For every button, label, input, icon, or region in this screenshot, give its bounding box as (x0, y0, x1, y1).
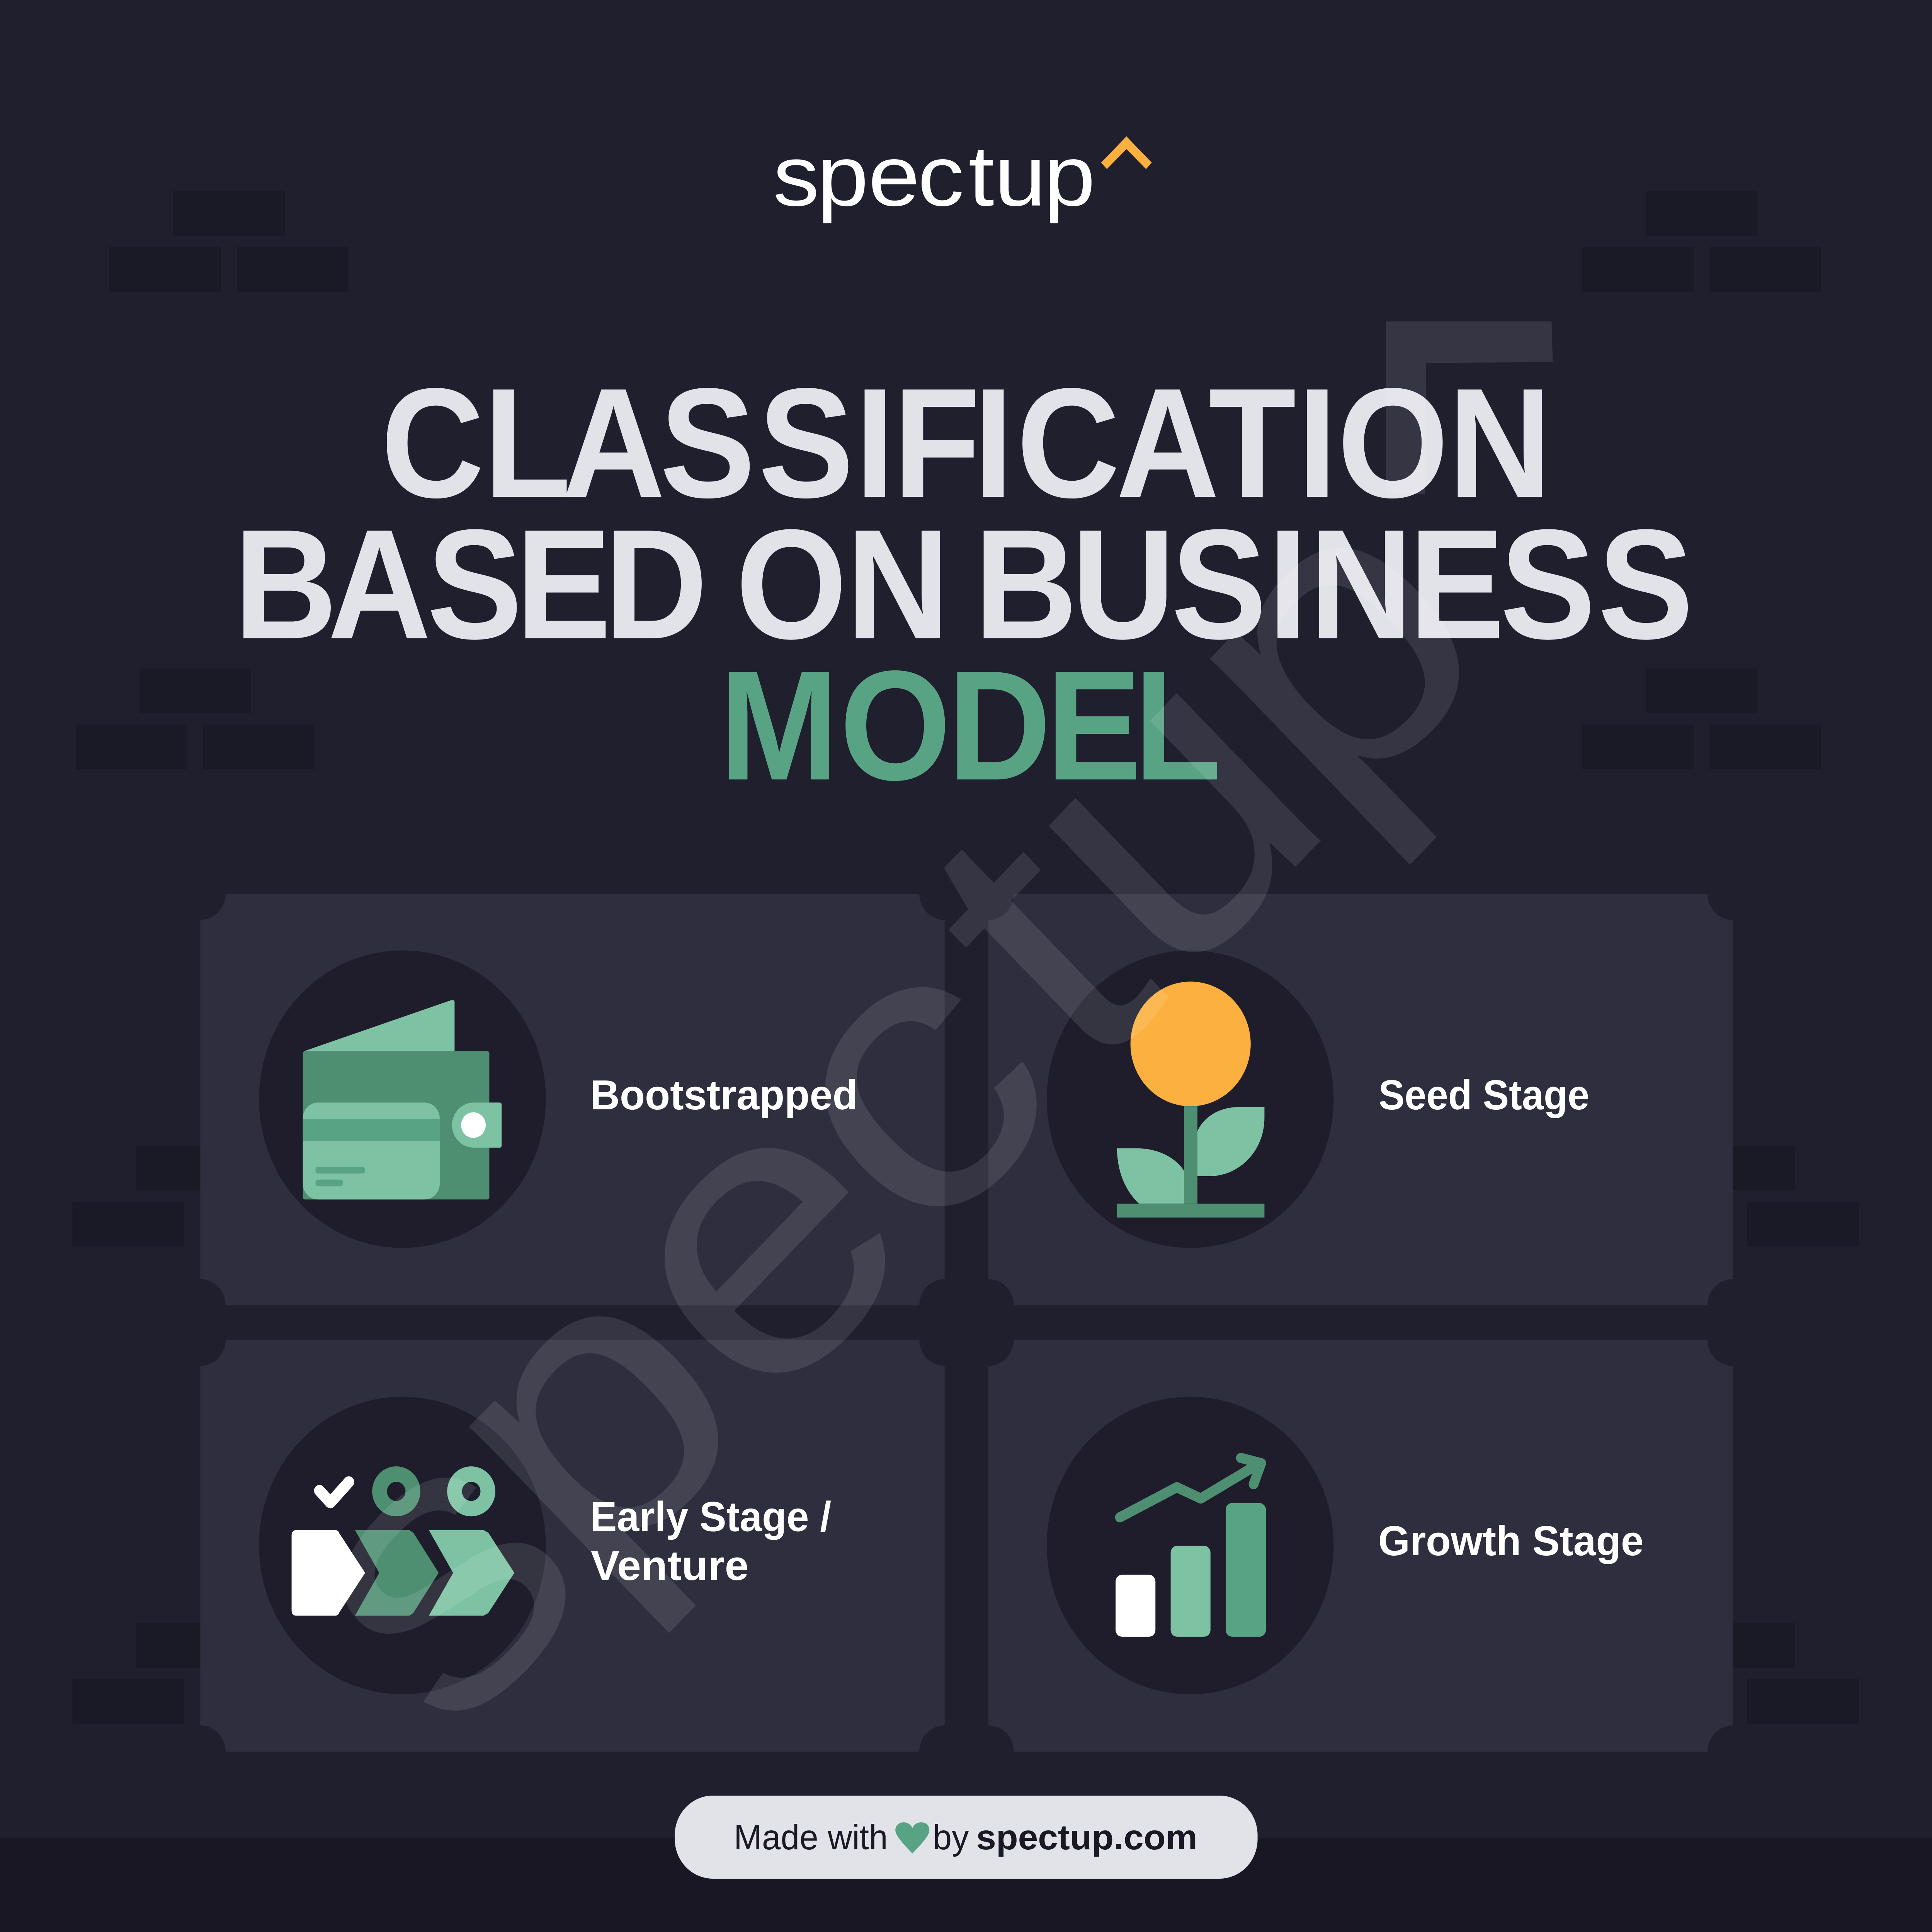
title (234, 356, 1694, 813)
logo: spectup: spectup (773, 128, 1095, 224)
panel: early stage / venture (200, 1340, 945, 1752)
icon: wallet (303, 1000, 502, 1199)
footer badge: Made with (734, 1818, 888, 1857)
footer badge (675, 1796, 1258, 1879)
label: Growth Stage: Growth Stage (1378, 1517, 1644, 1564)
icon: growth chart (1116, 1458, 1266, 1637)
label: Early Stage / Venture: Venture (591, 1542, 749, 1589)
label: Early Stage / Venture (590, 1493, 831, 1589)
icon: flower (1117, 981, 1264, 1218)
title: MODEL (719, 638, 1221, 813)
label: Seed Stage: Seed Stage (1379, 1071, 1589, 1118)
footer badge: by (933, 1818, 969, 1857)
title: BASED ON BUSINESS (234, 497, 1694, 672)
watermark: rotated spectup logo: spectup (204, 398, 1561, 1806)
panel: seed stage (988, 894, 1733, 1305)
icon: stage chevrons (292, 1474, 514, 1616)
label: Bootstrapped: Bootstrapped (590, 1071, 858, 1118)
panel: bootstrapped (200, 894, 945, 1305)
footer badge: spectup.com (976, 1818, 1197, 1857)
title: CLASSIFICATION (381, 356, 1551, 531)
panel: growth stage (988, 1340, 1733, 1752)
label: Early Stage / Venture: Early Stage / (590, 1493, 831, 1540)
